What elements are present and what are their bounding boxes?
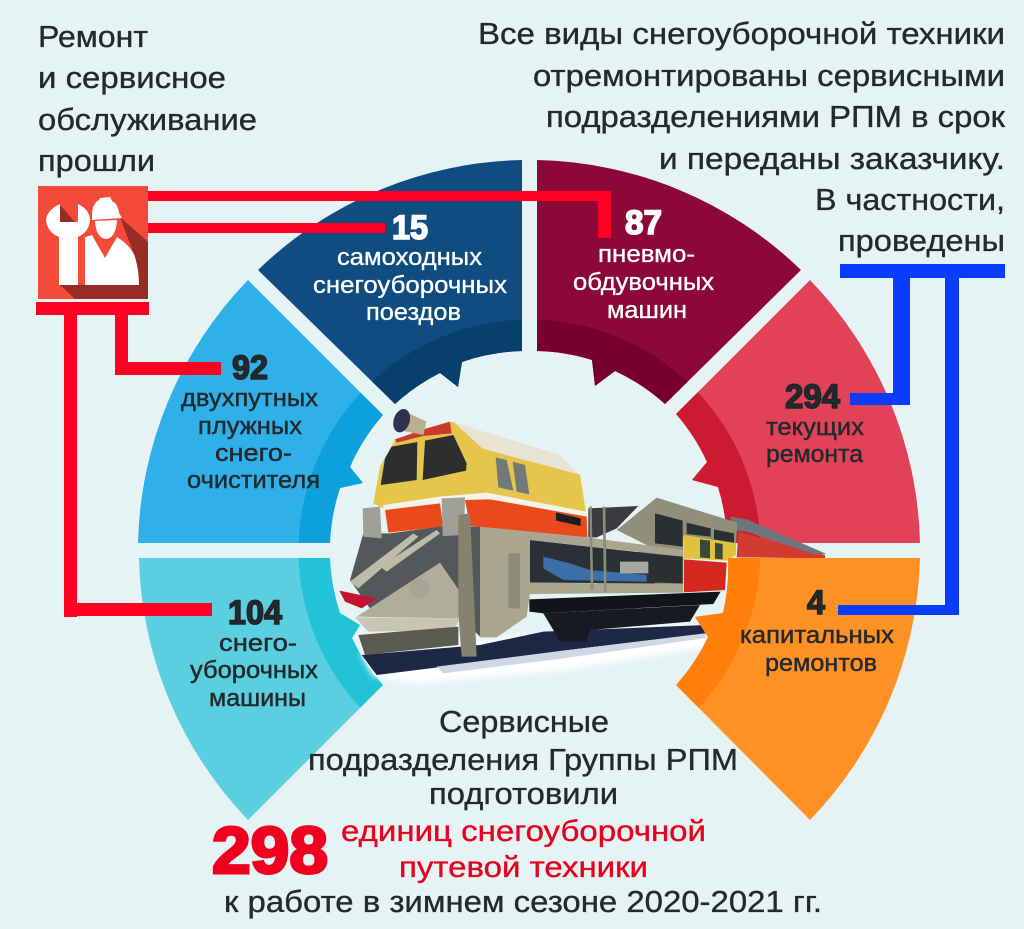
label: 15 trains: 15 (392, 209, 428, 247)
heading: left: прошли (38, 143, 155, 178)
label: 92 ploughs: очистителя (187, 467, 320, 494)
blue connectors (838, 264, 1005, 615)
label: 4 capital repairs: ремонтов (765, 650, 877, 677)
conveyor frame (597, 498, 737, 584)
segment: self-propelled trains (dark blue) (258, 160, 522, 404)
label: 104 machines (190, 594, 318, 712)
heading: left: и сервисное (38, 60, 226, 95)
bottom text block: единиц снегоуборочной (341, 815, 706, 848)
big number 298: 298 (212, 813, 328, 887)
red connectors (36, 191, 611, 617)
train photo illustration (339, 407, 827, 683)
label: 294 repairs: 294 (785, 378, 840, 416)
rear module yellow (684, 535, 736, 561)
label: 87 machines: машин (607, 297, 687, 324)
heading: right: подразделениями РПМ в срок (546, 99, 1005, 134)
label: 15 trains: снегоуборочных (313, 272, 507, 299)
label: 4 capital repairs: капитальных (740, 622, 894, 649)
label: 92 ploughs (181, 349, 320, 494)
vent red (395, 422, 452, 443)
heading: right: отремонтированы сервисными (533, 58, 1005, 93)
heading: right: проведены (838, 223, 1005, 258)
bottom text block: подготовили (429, 776, 618, 811)
label: 87 machines: пневмо- (598, 241, 695, 268)
label: 87 machines: 87 (625, 204, 662, 242)
label: 92 ploughs: 92 (232, 349, 268, 387)
label: 104 machines: 104 (228, 594, 282, 632)
icon wrench notch shadow (60, 205, 75, 222)
icon: repair worker with wrench (38, 186, 148, 299)
icon wrench (46, 204, 90, 285)
label: 15 trains: самоходных (337, 244, 482, 271)
label: 15 trains (313, 209, 507, 326)
white stripe (383, 493, 587, 517)
label: 104 machines: снего- (219, 630, 297, 657)
heading: right (478, 16, 1005, 258)
bottom text block: к работе в зимнем сезоне 2020-2021 гг. (224, 884, 822, 919)
segment: snow removal machines (cyan) (139, 558, 383, 820)
snow under train (360, 623, 707, 683)
heading: left: обслуживание (38, 102, 257, 137)
label: 15 trains: поездов (366, 299, 461, 326)
label: 294 repairs: ремонта (766, 441, 863, 468)
heading: right: В частности, (815, 182, 1005, 217)
main frame (480, 527, 683, 637)
bottom text block: Сервисные (439, 704, 609, 739)
icon shadow (60, 217, 148, 299)
label: 104 machines: машины (209, 685, 306, 712)
cab yellow (373, 422, 587, 517)
segment: plough cleaners (light blue) (138, 280, 383, 543)
label: 4 capital repairs: 4 (807, 584, 825, 622)
label: 92 ploughs: двухпутных (181, 385, 318, 412)
heading: right: Все виды снегоуборочной техники (478, 16, 1005, 51)
roof cream (453, 422, 578, 474)
frame panel detail (508, 553, 520, 608)
front machinery (350, 527, 480, 637)
searchlight (390, 407, 427, 435)
label: 104 machines: уборочных (190, 657, 318, 684)
label: 92 ploughs: плужных (198, 413, 302, 440)
rear car (730, 517, 827, 558)
bottom text block: подразделения Группы РПМ (308, 742, 738, 777)
cab windows (381, 435, 529, 494)
label: 87 machines (573, 204, 714, 324)
conveyor openings (655, 513, 734, 583)
arms (350, 530, 440, 588)
number plate (556, 513, 581, 526)
machine room dark (530, 540, 655, 583)
ladder (589, 506, 607, 592)
segment: capital repairs (orange, above train) (676, 558, 920, 820)
blue pipes (543, 557, 647, 582)
cylinders (363, 497, 465, 538)
track (362, 625, 707, 675)
sill (529, 592, 721, 613)
bottom text block (212, 704, 822, 919)
bottom text block: путевой техники (399, 851, 648, 884)
label: 4 capital repairs (740, 584, 894, 677)
red hoses and plate (339, 591, 377, 608)
red band cab (385, 499, 587, 537)
segment: pneumatic blowers (burgundy) (537, 160, 801, 404)
heading: left: Ремонт (38, 19, 148, 54)
icon worker (85, 197, 139, 285)
rear module red (684, 559, 727, 592)
label: 294 repairs: текущих (766, 414, 864, 441)
label: 92 ploughs: снего- (215, 440, 292, 467)
heading: left (38, 19, 257, 178)
heading: right: и переданы заказчику. (659, 141, 1005, 176)
plough (357, 563, 463, 618)
segment: current repairs (red) (676, 280, 920, 543)
bogie (543, 605, 700, 642)
label: 294 repairs (766, 378, 864, 468)
dark load behind ladder (588, 506, 638, 537)
label: 87 machines: обдувочных (573, 269, 714, 296)
